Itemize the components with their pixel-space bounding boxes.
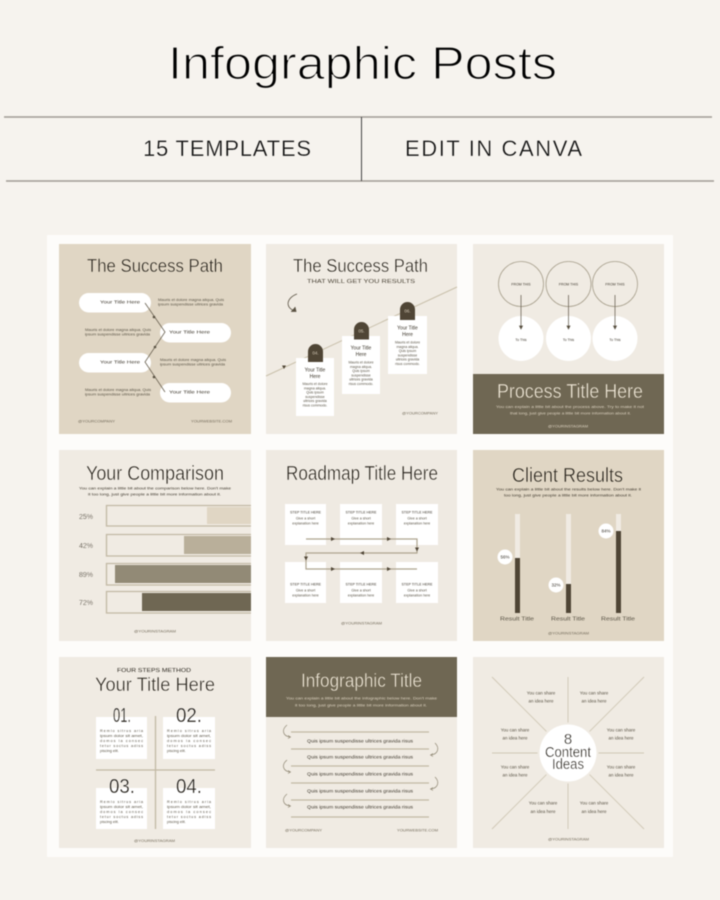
- step text: tetur soctus adiss: [167, 815, 211, 819]
- bar frames: [106, 506, 251, 613]
- panel: four steps: [59, 657, 251, 848]
- curved arrows: [283, 725, 438, 808]
- step text: [292, 516, 430, 598]
- result labels: Result Title: [500, 616, 534, 622]
- from labels: FROM THIS: [605, 282, 625, 286]
- side descriptions: Mauris et dolore magna aliqua. Quis: [85, 388, 151, 392]
- step text: explanation here: [292, 522, 319, 526]
- card body text: ultrices gravida: [349, 378, 373, 382]
- number arches: [308, 302, 415, 362]
- step text: explanation here: [404, 522, 430, 526]
- description: You can explain a little bit about the comparison below here. Don't make: [79, 486, 232, 490]
- card body text: ultrices gravida: [303, 399, 327, 403]
- step text: Remlo sitrus aria: [167, 800, 212, 804]
- step text: piscing elit.: [100, 749, 119, 753]
- footer: [78, 420, 232, 424]
- arch numbers: 04.: [312, 350, 319, 356]
- step text: Give a short: [296, 588, 315, 592]
- to labels: To This: [609, 338, 621, 342]
- step text: tetur soctus adiss: [167, 744, 211, 748]
- values: [500, 528, 611, 588]
- heading: The Success Path: [293, 256, 428, 276]
- step cards: [296, 316, 427, 416]
- percentages: 42%: [79, 541, 93, 550]
- idea labels: You can share: [527, 690, 556, 696]
- side descriptions: Mauris et dolore magna aliqua. Quis: [160, 358, 226, 362]
- to labels: [515, 338, 621, 342]
- center title: Ideas: [552, 756, 584, 773]
- footer: @YOURCOMPANY: [402, 412, 439, 416]
- step text: Give a short: [407, 516, 427, 520]
- idea labels: [501, 690, 636, 814]
- panel: client results: [473, 450, 664, 641]
- from circles: [498, 262, 638, 306]
- idea labels: an idea here: [530, 809, 556, 814]
- step numbers: 03.: [109, 776, 135, 798]
- step titles: STEP TITLE HERE: [401, 582, 433, 586]
- idea labels: You can share: [580, 800, 609, 806]
- heading: The Success Path: [87, 256, 223, 276]
- step text: explanation here: [292, 594, 319, 598]
- to labels: To This: [563, 338, 574, 342]
- panel: process: [473, 244, 664, 434]
- card titles: Your Title: [305, 368, 326, 374]
- process description: You can explain a little bit about the process above. Try to make it not: [496, 405, 645, 409]
- idea labels: You can share: [501, 728, 530, 732]
- step text: piscing elit.: [167, 820, 186, 824]
- process description: that long, just give people a little bit more information about it.: [510, 412, 631, 416]
- values: 56%: [500, 554, 510, 560]
- heading: Infographic Title: [301, 671, 422, 692]
- white gallery panel: [47, 235, 673, 857]
- step text: explanation here: [348, 522, 374, 526]
- card body text: Mauris et dolore: [395, 340, 420, 344]
- idea labels: an idea here: [581, 698, 607, 704]
- description: too long, just give people a little bit more information about it.: [504, 492, 632, 498]
- values: 32%: [551, 582, 561, 588]
- card titles: Here: [310, 374, 321, 380]
- idea labels: You can share: [529, 800, 558, 806]
- side descriptions: ipsum suspendisse ultrices gravida: [158, 302, 223, 306]
- center circle: [540, 724, 596, 782]
- card body text: risus commodo.: [395, 362, 420, 366]
- from labels: FROM THIS: [511, 282, 531, 286]
- card body text: risus commodo.: [303, 404, 327, 408]
- footer: @YOURCOMPANY: [78, 420, 116, 424]
- step text: Give a short: [351, 588, 371, 592]
- description: it too long, just give people a little bit more information about it.: [295, 704, 427, 708]
- card titles: Here: [402, 332, 413, 338]
- panel: roadmap: [266, 450, 457, 641]
- card titles: [305, 326, 418, 380]
- value bubbles: [498, 524, 614, 592]
- step text: Give a short: [351, 516, 371, 520]
- footer: YOURWEBSITE.COM: [191, 420, 232, 424]
- description: [286, 696, 437, 708]
- footer: YOURWEBSITE.COM: [397, 828, 438, 832]
- card body text: Mauris et dolore: [348, 360, 374, 364]
- heading: Your Title Here: [95, 675, 215, 696]
- step text: [100, 729, 212, 824]
- step titles: STEP TITLE HERE: [345, 510, 377, 514]
- panel: infographic title list: [266, 657, 457, 848]
- subtitle: THAT WILL GET YOU RESULTS: [307, 279, 415, 285]
- card body text: magna aliqua.: [350, 365, 372, 369]
- list text: [307, 738, 413, 810]
- card body text: magna aliqua.: [396, 345, 419, 349]
- heading: Your Comparison: [86, 463, 224, 485]
- step text: Give a short: [407, 588, 427, 592]
- step numbers: 04.: [176, 776, 202, 798]
- header band: [4, 117, 714, 181]
- card titles: Your Title: [397, 326, 418, 332]
- route arrowheads: [304, 537, 419, 571]
- step text: piscing elit.: [100, 820, 119, 824]
- bar tracks: [515, 514, 621, 613]
- card body text: Mauris et dolore: [302, 382, 328, 386]
- list text: Quis ipsum suspendisse ultrices gravida risus: [307, 788, 413, 794]
- panel: comparison: [59, 450, 251, 641]
- process description: [496, 405, 645, 416]
- idea labels: an idea here: [502, 736, 528, 740]
- idea labels: You can share: [607, 764, 636, 770]
- description: You can explain a little bit about the results below here. Don't make it: [496, 486, 642, 492]
- step titles: STEP TITLE HERE: [345, 582, 377, 586]
- description: You can explain a little bit about the infographic below here. Don't make: [286, 696, 437, 700]
- cards: [96, 717, 215, 829]
- step text: tetur soctus adiss: [100, 815, 143, 819]
- footer: @YOURINSTAGRAM: [134, 630, 176, 634]
- percentages: 72%: [79, 598, 93, 607]
- eyebrow: FOUR STEPS METHOD: [117, 668, 191, 674]
- from labels: [511, 282, 625, 286]
- bar fills: [515, 531, 621, 613]
- step cards: [285, 504, 438, 603]
- footer: @YOURCOMPANY: [285, 828, 323, 832]
- pill labels: Your Title Here: [169, 330, 211, 334]
- idea labels: You can share: [580, 690, 609, 696]
- footer: @YOURINSTAGRAM: [548, 632, 589, 636]
- result labels: [500, 616, 635, 622]
- card body text: Quis ipsum: [399, 349, 416, 353]
- list text: Quis ipsum suspendisse ultrices gravida risus: [307, 738, 413, 744]
- pill labels: Your Title Here: [100, 300, 141, 304]
- values: 84%: [601, 528, 611, 534]
- center title: Content: [545, 744, 592, 761]
- heading band: [266, 657, 457, 717]
- step text: explanation here: [404, 594, 430, 598]
- step titles: [290, 510, 433, 586]
- card titles: Here: [356, 352, 367, 358]
- step text: ipsum dolor sit amet,: [100, 734, 143, 738]
- list rules: [291, 732, 429, 817]
- to circles: [498, 316, 638, 361]
- card body text: [302, 340, 420, 408]
- card titles: Your Title: [351, 346, 372, 352]
- zigzag connector: [145, 303, 165, 392]
- result labels: Result Title: [601, 616, 635, 622]
- percentages: [79, 512, 93, 607]
- step text: Remlo sitrus aria: [100, 729, 144, 733]
- label: 15 templates: 15 TEMPLATES: [143, 136, 311, 161]
- card body text: ultrices gravida: [396, 358, 419, 362]
- pills: [79, 293, 231, 402]
- step titles: STEP TITLE HERE: [290, 582, 322, 586]
- description: [79, 486, 232, 496]
- arch numbers: [312, 308, 411, 356]
- side descriptions: ipsum suspendisse ultrices gravida: [85, 392, 150, 396]
- idea labels: an idea here: [502, 772, 528, 778]
- step text: ipsum dolor sit amet,: [167, 805, 211, 809]
- list text: Quis ipsum suspendisse ultrices gravida risus: [307, 772, 413, 776]
- process title: Process Title Here: [497, 381, 643, 403]
- icon: line arrowhead: [282, 366, 286, 369]
- side descriptions: ipsum suspendisse ultrices gravida: [85, 332, 150, 336]
- card body text: Quis ipsum: [306, 391, 324, 395]
- title: Infographic Posts: [168, 37, 557, 89]
- footer: @YOURINSTAGRAM: [341, 622, 382, 626]
- footer: @YOURINSTAGRAM: [548, 424, 588, 428]
- rising line: [266, 287, 457, 376]
- step text: tetur soctus adiss: [100, 744, 143, 748]
- pill labels: Your Title Here: [169, 390, 211, 394]
- card body text: Quis ipsum: [352, 369, 370, 373]
- side descriptions: [85, 298, 226, 396]
- heading: Roadmap Title Here: [286, 463, 438, 485]
- card body text: suspendisse: [398, 353, 417, 357]
- idea labels: an idea here: [581, 809, 607, 814]
- icon: curved arrow: [288, 294, 297, 312]
- card body text: suspendisse: [351, 373, 371, 377]
- pill labels: [100, 300, 211, 394]
- radial dividers: [492, 677, 644, 829]
- step titles: STEP TITLE HERE: [401, 510, 433, 514]
- step text: domos la consec: [167, 739, 211, 743]
- result labels: Result Title: [551, 616, 585, 622]
- idea labels: an idea here: [608, 772, 634, 778]
- footer: [285, 828, 438, 832]
- panel: content ideas: [473, 657, 664, 848]
- step text: ipsum dolor sit amet,: [167, 734, 211, 738]
- route line: [306, 539, 417, 569]
- footer: @YOURINSTAGRAM: [548, 838, 589, 842]
- step text: piscing elit.: [167, 749, 186, 753]
- footer: @YOURINSTAGRAM: [134, 839, 175, 843]
- step text: explanation here: [348, 594, 374, 598]
- heading band: [473, 374, 664, 434]
- heading: Client Results: [512, 465, 623, 487]
- list text: Quis ipsum suspendisse ultrices gravida risus: [307, 804, 413, 810]
- percentages: 89%: [79, 570, 93, 579]
- panel: success path steps: [266, 244, 457, 434]
- side descriptions: ipsum suspendisse ultrices gravida: [160, 362, 225, 366]
- step numbers: [109, 705, 202, 798]
- step text: ipsum dolor sit amet,: [100, 805, 143, 809]
- idea labels: You can share: [501, 764, 530, 770]
- step numbers: 02.: [176, 705, 202, 727]
- percentages: 25%: [79, 512, 93, 521]
- step text: Remlo sitrus aria: [100, 800, 144, 804]
- center title: 8: [564, 731, 572, 748]
- idea labels: an idea here: [608, 736, 634, 740]
- list text: Quis ipsum suspendisse ultrices gravida risus: [307, 754, 413, 760]
- side descriptions: Mauris et dolore magna aliqua. Quis: [85, 328, 151, 332]
- label: edit in canva: EDIT IN CANVA: [405, 136, 582, 161]
- card body text: magna aliqua.: [304, 386, 326, 390]
- step numbers: 01.: [113, 705, 131, 727]
- pill labels: Your Title Here: [100, 360, 141, 364]
- step text: domos la consec: [167, 810, 211, 814]
- side descriptions: Mauris et dolore magna aliqua. Quis: [158, 298, 224, 302]
- arch numbers: 05.: [358, 328, 365, 334]
- idea labels: an idea here: [528, 698, 554, 704]
- step text: domos la consec: [100, 739, 143, 743]
- card body text: risus commodo.: [349, 382, 373, 386]
- step text: Remlo sitrus aria: [167, 729, 212, 733]
- from labels: FROM THIS: [559, 282, 579, 286]
- description: it too long, just give people a little bit more information about it.: [88, 492, 221, 496]
- arch numbers: 06.: [404, 308, 411, 314]
- description: [496, 486, 642, 498]
- step titles: STEP TITLE HERE: [290, 510, 322, 514]
- idea labels: You can share: [607, 728, 636, 732]
- to labels: To This: [515, 338, 527, 342]
- cross dividers: [96, 716, 215, 829]
- bar fills: [115, 507, 251, 611]
- card body text: suspendisse: [305, 395, 325, 399]
- step text: domos la consec: [100, 810, 143, 814]
- center title: [545, 731, 592, 773]
- panel: success path pills: [59, 244, 251, 434]
- arrows: [520, 295, 616, 329]
- step text: Give a short: [296, 516, 315, 520]
